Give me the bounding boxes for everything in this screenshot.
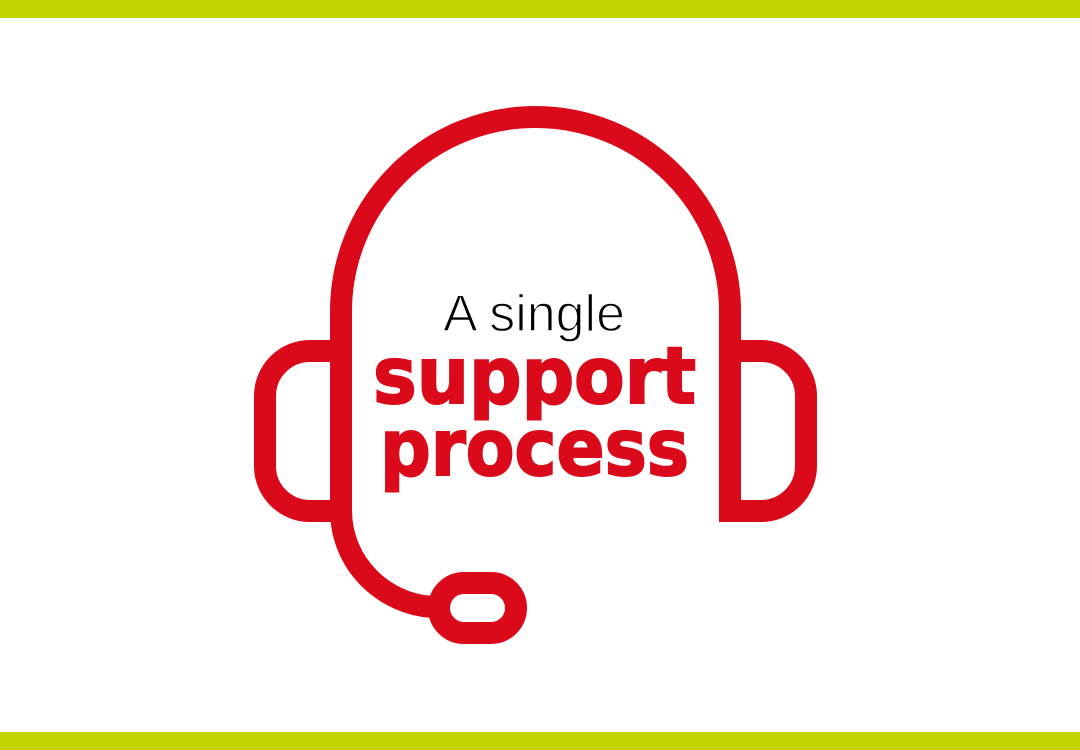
title line: support: support xyxy=(373,332,696,422)
right ear cup xyxy=(730,351,806,511)
headband and microphone boom xyxy=(341,117,730,607)
bottom green bar xyxy=(0,732,1080,750)
microphone xyxy=(439,583,516,633)
top green bar xyxy=(0,0,1080,18)
title line: A single: A single xyxy=(443,285,625,343)
left ear cup xyxy=(265,351,341,511)
title text xyxy=(373,285,696,494)
icon: headset xyxy=(265,117,806,633)
title line: process: process xyxy=(380,404,689,494)
